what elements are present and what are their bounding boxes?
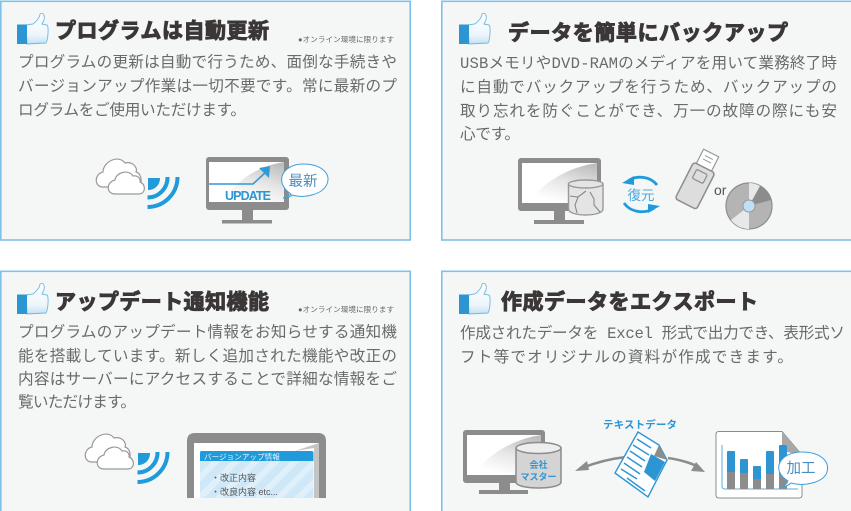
callout: edit — [779, 452, 828, 487]
body text: プログラムのアップデート情報をお知らせする通知機 — [18, 322, 397, 341]
body text: 取り忘れを防ぐことができ、万一の故障の際にも安 — [460, 102, 837, 120]
callout: latest: 最新 — [288, 173, 318, 190]
body text: 内容はサーバーにアクセスすることで詳細な情報をご — [18, 370, 397, 388]
icon: thumbs up — [459, 283, 490, 314]
panel: update notification — [1, 271, 410, 511]
icon: restore arrows — [622, 176, 660, 213]
icon: chart document — [716, 432, 802, 498]
icon: text document — [615, 432, 667, 497]
icon: monitor with version info: ・改正内容 — [211, 472, 256, 483]
label: text data: テキストデータ — [603, 418, 677, 431]
body text — [18, 322, 397, 411]
icon: monitor — [518, 158, 601, 224]
icon: company master database — [516, 442, 561, 488]
icon: company master database: 会社 — [529, 459, 548, 470]
icon: monitor with version info — [187, 433, 326, 498]
icon: thumbs up — [17, 283, 48, 314]
body text: 覧いただけます。 — [18, 393, 136, 411]
icon: USB memory — [675, 148, 722, 210]
body text: バージョンアップ作業は一切不要です。常に最新のプ — [18, 77, 397, 95]
body text: プログラムの更新は自動で行うため、面倒な手続きや — [18, 53, 397, 71]
icon: signal waves — [148, 177, 178, 207]
panel: data backup — [442, 1, 851, 240]
icon: disc — [726, 183, 772, 229]
icon: broken database — [568, 180, 603, 215]
icon: monitor update — [206, 157, 289, 224]
body text: ログラムをご使用いただけます。 — [18, 101, 246, 119]
body text: フト等でオリジナルの資料が作成できます。 — [460, 348, 793, 366]
body text: に自動でバックアップを行うため、バックアップの — [460, 78, 837, 96]
body text: 作成されたデータを Excel 形式で出力でき、表形式ソ — [460, 323, 845, 343]
body text: USBメモリやDVD-RAMのメディアを用いて業務終了時 — [460, 53, 837, 73]
icon: monitor with version info: バージョンアップ情報 — [204, 452, 280, 462]
heading: データを簡単にバックアップ — [508, 21, 788, 45]
heading: アップデート通知機能 — [55, 290, 269, 314]
icon: monitor — [463, 430, 545, 494]
icon: restore arrows: 復元 — [628, 187, 654, 203]
note: ●オンライン環境に限ります — [298, 304, 394, 314]
icon: thumbs up — [459, 13, 490, 44]
body text: 心です。 — [460, 125, 520, 143]
panel: program auto update — [1, 1, 410, 240]
icon: monitor with version info: ・改良内容 etc... — [211, 486, 278, 497]
panel: export — [442, 271, 851, 511]
note: ●オンライン環境に限ります — [298, 34, 394, 44]
arrow: to master — [575, 457, 626, 471]
icon: signal waves — [138, 452, 168, 482]
arrow: to chart — [668, 458, 705, 472]
icon: monitor update: UPDATE — [225, 189, 271, 203]
callout: latest — [282, 164, 328, 198]
heading: プログラムは自動更新 — [55, 19, 269, 43]
body text — [18, 53, 397, 119]
body text — [460, 53, 837, 143]
heading: 作成データをエクスポート — [501, 290, 758, 314]
icon: company master database: マスター — [520, 471, 557, 482]
callout: edit: 加工 — [786, 460, 816, 477]
icon: cloud — [96, 159, 144, 194]
icon: cloud — [85, 434, 133, 469]
body text: 能を搭載しています。新しく追加された機能や改正の — [18, 347, 397, 365]
body text — [460, 323, 845, 366]
label: or: or — [714, 182, 727, 198]
icon: thumbs up — [17, 13, 48, 44]
